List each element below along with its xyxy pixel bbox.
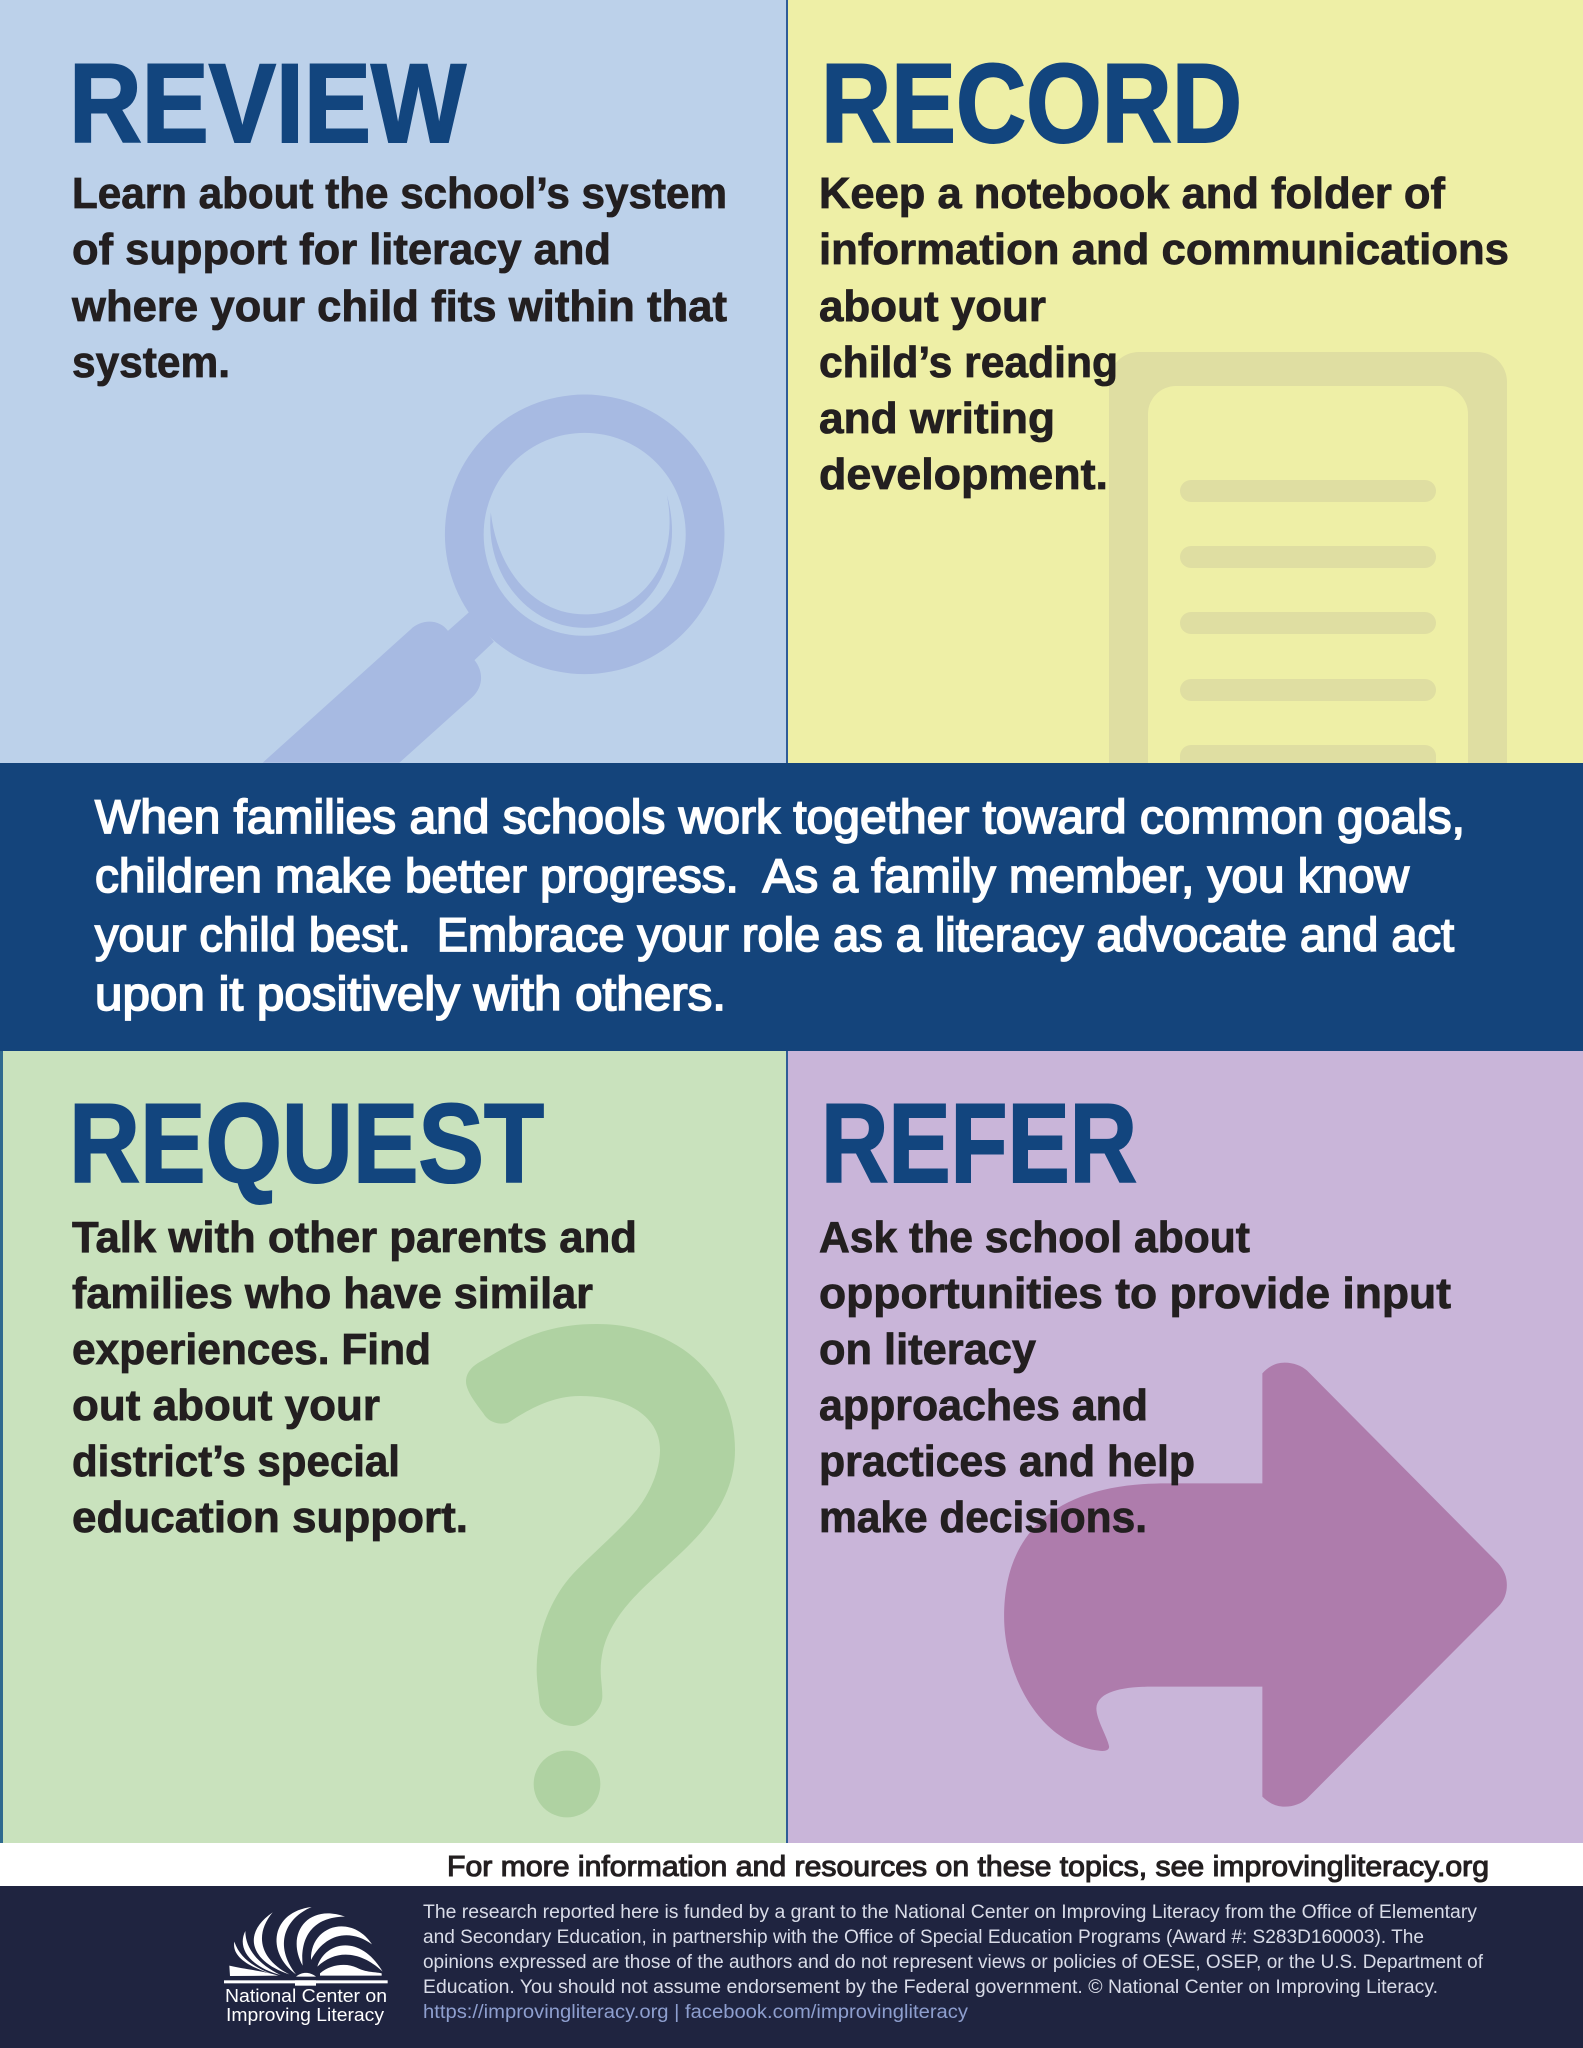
- footer panel: [0, 1886, 1583, 2048]
- text: request body: Talk with other parents and: [72, 1213, 637, 1262]
- text: review body: where your child fits within that: [71, 282, 727, 331]
- text: funding disclaimer: opinions expressed are those of the authors and do not represent views or policies of OESE, OSEP, or the U.S. Department of: [423, 1952, 1484, 1973]
- panel: record: [786, 0, 1583, 763]
- text: funding disclaimer: https://improvingliteracy.org | facebook.com/improvingliteracy: [423, 2002, 969, 2023]
- text: request body: families who have similar: [72, 1269, 593, 1318]
- panel: request: [0, 1051, 786, 1843]
- text: record body: Keep a notebook and folder of: [819, 169, 1445, 218]
- text: refer body: opportunities to provide input: [819, 1269, 1451, 1318]
- text: record body: development.: [819, 450, 1108, 499]
- text: record body: information and communications: [819, 225, 1509, 274]
- banner: family role message: your child best. Embrace your role as a literacy advocate and act: [95, 908, 1454, 961]
- banner: family role message: children make better progress. As a family member, you know: [95, 849, 1410, 902]
- text: funding disclaimer: [423, 1902, 1484, 2023]
- text: funding disclaimer: and Secondary Education, in partnership with the Office of Special Education Programs (Award #: S283D160003). The: [423, 1927, 1424, 1948]
- icon: arrow: [1004, 1363, 1507, 1807]
- text: funding disclaimer: Education. You should not assume endorsement by the Federal government. © National Center on Improving Literacy.: [423, 1977, 1438, 1998]
- text: refer body: practices and help: [819, 1437, 1195, 1486]
- banner: family role message: [0, 763, 1583, 1051]
- text: request body: district’s special: [72, 1437, 400, 1486]
- text: funding disclaimer: The research reported here is funded by a grant to the National Center on Improving Literacy from the Office of Elementary: [423, 1902, 1478, 1923]
- text: record body: child’s reading: [819, 338, 1118, 387]
- text: record body: about your: [819, 282, 1046, 331]
- text: request body: education support.: [72, 1493, 468, 1542]
- text: refer body: Ask the school about: [819, 1213, 1250, 1262]
- text: refer body: on literacy: [819, 1325, 1037, 1374]
- text: request body: [72, 1213, 637, 1542]
- text: record body: and writing: [819, 394, 1055, 443]
- text: request body: experiences. Find: [72, 1325, 431, 1374]
- text: record body: [819, 169, 1509, 499]
- text: request body: out about your: [72, 1381, 380, 1430]
- logo: National Center on Improving Literacy: National Center on: [225, 1985, 387, 2006]
- heading: refer: REFER: [821, 1081, 1137, 1206]
- text: review body: of support for literacy and: [72, 225, 611, 274]
- text: refer body: approaches and: [819, 1381, 1148, 1430]
- panel: refer: [786, 1051, 1583, 1843]
- banner: family role message: When families and schools work together toward common goals,: [95, 790, 1465, 843]
- panel: review: [0, 0, 786, 763]
- logo: National Center on Improving Literacy: [224, 1907, 388, 2025]
- text: refer body: [819, 1213, 1451, 1542]
- logo: National Center on Improving Literacy: Improving Literacy: [226, 2004, 385, 2025]
- text: review body: system.: [72, 338, 230, 387]
- icon: document: [1109, 352, 1507, 763]
- heading: record: RECORD: [821, 41, 1242, 166]
- text: more information line: For more information and resources on these topics, see improvingliteracy.org: [447, 1851, 1489, 1883]
- heading: request: REQUEST: [69, 1081, 544, 1206]
- icon: question mark: [466, 1324, 735, 1817]
- text: review body: [71, 169, 727, 387]
- heading: review: REVIEW: [69, 41, 466, 166]
- banner: family role message: upon it positively with others.: [95, 967, 726, 1020]
- text: review body: Learn about the school’s system: [72, 169, 727, 218]
- text: refer body: make decisions.: [819, 1493, 1147, 1542]
- icon: magnifying glass: [263, 395, 724, 763]
